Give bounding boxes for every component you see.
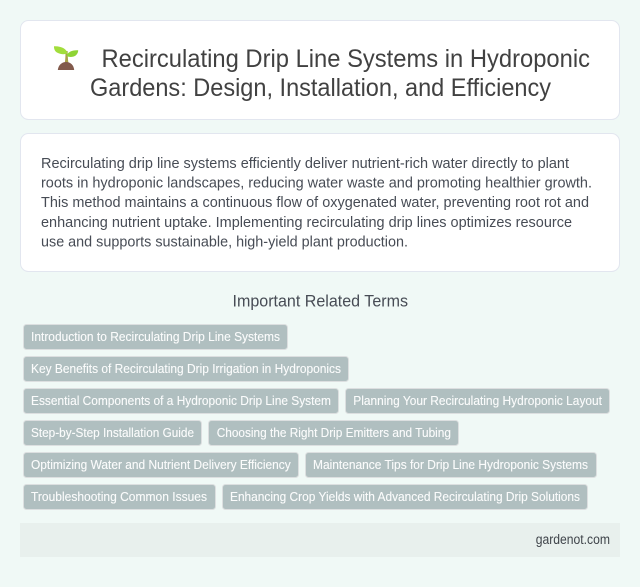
heading: important related terms: Important Related Terms <box>232 292 408 311</box>
panel: description <box>20 134 620 272</box>
tag <box>24 452 298 478</box>
text block: description: Recirculating drip line systems efficiently deliver nutrient-rich water directly to plant <box>41 156 569 172</box>
title: Gardens: Design, Installation, and Efficiency <box>90 75 552 102</box>
tag <box>24 388 338 414</box>
tag: Key Benefits of Recirculating Drip Irrigation in Hydroponics <box>31 362 341 376</box>
tag <box>306 452 596 478</box>
tag: Planning Your Recirculating Hydroponic Layout <box>353 394 602 408</box>
tag: Step-by-Step Installation Guide <box>31 426 194 440</box>
footer <box>20 523 620 557</box>
tag: Essential Components of a Hydroponic Drip Line System <box>31 394 331 408</box>
text block: description: enhancing nutrient uptake. Implementing recirculating drip lines optimizes resource <box>41 215 572 231</box>
tag <box>24 324 288 350</box>
panel: title card <box>20 20 620 120</box>
tag <box>208 420 458 446</box>
tag <box>346 388 610 414</box>
tag: Maintenance Tips for Drip Line Hydroponic Systems <box>313 458 588 472</box>
footer: gardenot.com <box>536 532 610 547</box>
tag <box>24 420 202 446</box>
text block: description: roots in hydroponic landscapes, reducing water waste and promoting healthier growth. <box>41 176 592 192</box>
text block: description: This method maintains a continuous flow of oxygenated water, preventing root rot and <box>41 195 589 211</box>
tag: Optimizing Water and Nutrient Delivery Efficiency <box>31 458 291 472</box>
icon: seedling <box>54 46 78 70</box>
tag: Enhancing Crop Yields with Advanced Recirculating Drip Solutions <box>230 490 580 504</box>
tag: Troubleshooting Common Issues <box>31 490 207 504</box>
panel: related term tags <box>24 324 610 510</box>
tag: Choosing the Right Drip Emitters and Tubing <box>217 426 451 440</box>
tag: Introduction to Recirculating Drip Line Systems <box>31 330 280 344</box>
title: Recirculating Drip Line Systems in Hydroponic <box>102 46 590 73</box>
text block: description: use and supports sustainable, high-yield plant production. <box>41 234 408 250</box>
text block: description <box>41 156 592 250</box>
title <box>90 46 590 102</box>
tag <box>222 484 588 510</box>
tag <box>24 356 348 382</box>
tag <box>24 484 216 510</box>
